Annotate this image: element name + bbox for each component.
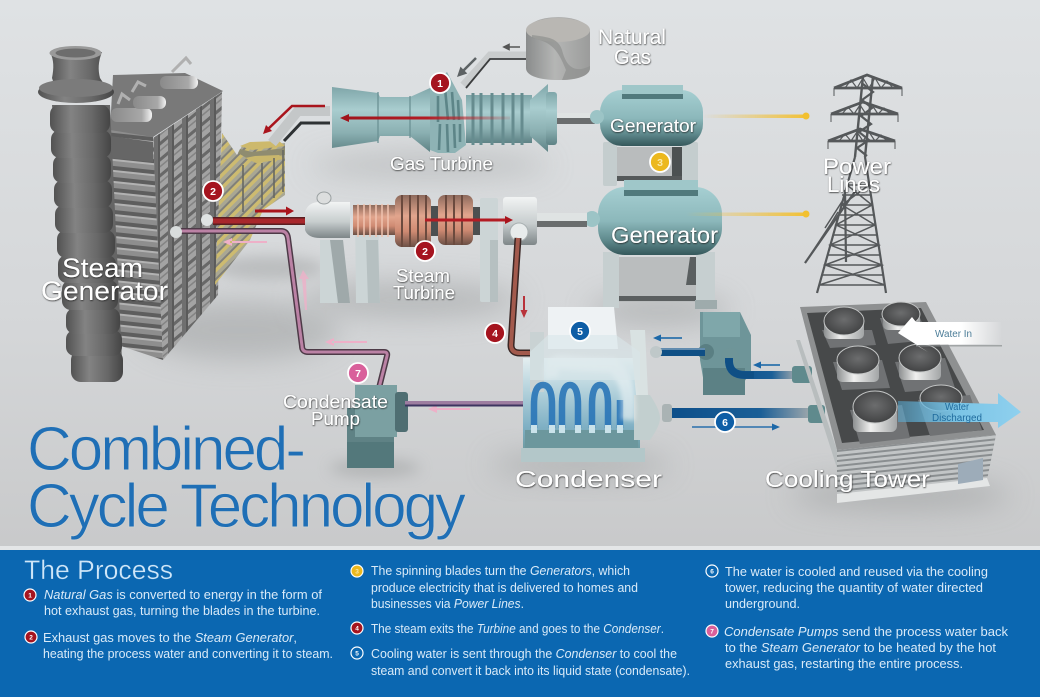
blue flow arrows [653,334,780,430]
gas duct to generator [272,111,330,143]
top generator stand [603,142,698,186]
badge 5: 5 [577,326,583,338]
badge 1: 1 [437,78,443,90]
label: steam generator: Generator [41,276,168,306]
condensate pump [347,385,408,468]
natural gas tank [526,17,590,80]
badge 5 [570,321,590,341]
water in arrow: Water In [935,329,972,340]
step 5: Cooling water is sent through the Condenser to cool the [371,647,677,661]
natural gas feed pipe [459,44,526,88]
step 3: 3 [355,568,359,576]
water discharged arrow [898,393,1021,428]
steam generator right face [153,92,222,360]
turbine blades [430,72,466,153]
step 2: heating the process water and converting it to steam. [43,647,333,661]
electricity beams [686,112,810,218]
step 5: steam and convert it back into its liquid state (condensate). [371,664,690,678]
heat arrow from exchanger [255,206,294,216]
label: steam generator [41,253,168,306]
badge 4: 4 [492,328,498,340]
turbine casing [305,202,350,238]
steam to condenser pipe [511,238,534,353]
step 2: 2 [29,634,33,642]
cooling water supply pump [698,312,751,395]
label: lower generator: Generator [611,222,718,248]
label: power lines: Lines [827,172,880,197]
badge 2 steam turbine [415,241,435,261]
label: natural gas: Natural [598,26,666,49]
top generator [590,85,703,146]
valve cylinders [111,58,198,122]
red down arrow [520,296,528,318]
fan pads [822,318,982,444]
badge 2 steam generator [203,181,223,201]
steam turbine [305,192,537,303]
water discharged arrow: Discharged [932,413,982,424]
lower generator [584,180,722,255]
step 6: underground. [725,597,800,611]
step 6: tower, reducing the quantity of water directed [725,581,983,595]
steam generator top [110,73,223,137]
label: steam turbine: Turbine [393,282,455,303]
title: Cycle Technology [27,472,466,541]
shaft to lower generator [537,213,587,227]
label: steam generator: Steam [62,253,143,283]
badge 4 [485,323,505,343]
pump to condenser pipe [405,401,525,406]
label: cooling tower: Cooling Tower [765,466,930,492]
floor shadows [140,151,1010,511]
tower side walls [837,435,996,497]
label: condensate pump [283,392,388,429]
label: natural gas: Gas [614,46,651,69]
illustration: steam generator [38,46,285,382]
label: power lines [823,154,891,197]
tube feet [531,425,623,433]
condenser [521,307,660,462]
badge 3 [650,152,670,172]
label: power lines: Power [823,154,891,179]
label: top generator: Generator [610,116,696,136]
step 3: produce electricity that is delivered to homes and [371,581,638,595]
label: natural gas [598,26,666,69]
condenser ends [630,330,648,395]
label: condensate pump: Condensate [283,392,388,412]
badge 3: 3 [657,157,663,169]
badge 1 [430,73,450,93]
step 3 [351,564,638,611]
steam pipe [201,214,305,226]
badge 2 steam generator: 2 [210,186,216,198]
step 1: hot exhaust gas, turning the blades in the turbine. [44,604,320,618]
discharge pipe [662,404,825,423]
turbine stands [320,198,498,303]
frost [551,362,629,420]
step 6: The water is cooled and reused via the cooling [725,565,988,579]
cooling tower [796,302,996,503]
water in arrow [898,317,1003,352]
copper rotor [353,195,480,247]
gas turbine [332,72,557,153]
condenser body [523,358,640,450]
badge 6: 6 [722,417,728,429]
step 1 [24,588,323,618]
lower generator stand [603,252,717,309]
flow arrow [425,216,513,224]
steam generator left face [110,128,163,360]
white top panel [548,307,618,349]
step 6: 6 [710,568,714,576]
condensate return pipe [170,226,387,392]
title [27,415,466,541]
step 1: Natural Gas is converted to energy in the form of [44,588,323,602]
step 3: The spinning blades turn the Generators, which [371,564,630,578]
step 2 [25,631,333,661]
fans [824,302,962,432]
hatch box [958,458,983,484]
pump suction pipe [729,358,812,383]
coupling housing [503,197,537,245]
U tubes [534,385,620,428]
panel: the process [0,546,1040,697]
exhaust stack [38,46,123,382]
step 7 [706,625,1009,671]
cooling water pipes [650,346,825,423]
diagram number badges [203,73,735,432]
exchanger section [215,133,285,285]
exhaust arrow [263,106,325,134]
pipe into condenser [650,346,705,358]
step 7: exhaust gas, restarting the entire process. [725,657,963,671]
heading: the process: The Process [24,555,173,585]
inlet bell [332,87,430,152]
badge 6 [715,412,735,432]
step 7: Condensate Pumps send the process water back [724,625,1009,639]
label: steam turbine [393,265,455,303]
step 3: businesses via Power Lines. [371,597,524,611]
pink flow arrows [223,238,470,413]
step 6 [706,565,988,611]
badge 2 steam turbine: 2 [422,246,428,258]
step 7: to the Steam Generator to be heated by the hot [725,641,997,655]
gas turbine flow arrow [340,114,510,122]
step 1: 1 [28,592,32,600]
step 4: The steam exits the Turbine and goes to the Condenser. [371,622,664,636]
title: Combined- [27,415,306,484]
badge 7: 7 [355,368,361,380]
tower top deck [800,302,996,450]
label: steam turbine: Steam [396,265,450,286]
compressor section [466,84,557,152]
label: gas turbine: Gas Turbine [390,154,493,174]
label: condensate pump: Pump [311,409,360,429]
water discharged arrow: Water [945,402,970,413]
step 4: 4 [355,626,359,632]
badge 7 [348,363,368,383]
left face upper plate [110,136,153,162]
step 2: Exhaust gas moves to the Steam Generator, [43,631,297,645]
step 5 [351,647,690,678]
power line tower [805,75,902,293]
step 5: 5 [355,650,359,658]
shaft to top generator [557,113,595,124]
step 7: 7 [710,628,714,636]
label: condenser: Condenser [515,466,662,492]
